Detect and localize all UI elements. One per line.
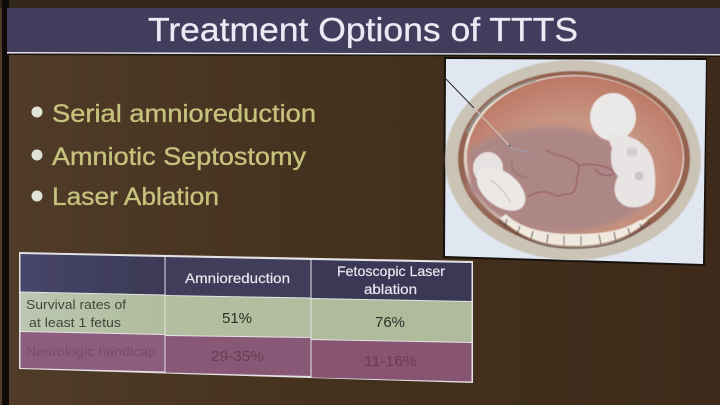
bullet: laser ablation: Laser Ablation <box>52 183 219 211</box>
row label: survival rates: at least 1 fetus <box>29 315 122 330</box>
value: 76%: 76% <box>375 314 405 331</box>
table row: neurologic handicap <box>20 332 472 382</box>
table header row <box>20 254 472 301</box>
comparison table <box>19 252 473 383</box>
fetoscope needle <box>446 79 510 146</box>
placental vessels <box>508 146 626 197</box>
bullet list <box>32 100 316 211</box>
value: 29-35%: 29-35% <box>211 348 264 365</box>
placenta edge and cervix segments <box>498 214 650 248</box>
row label: survival rates: Survival rates of <box>26 297 126 312</box>
fetus: smaller donor twin <box>468 152 534 220</box>
column heading: fetoscopic laser ablation <box>337 263 445 297</box>
illustration: fetoscopic laser treatment of twins in uterus <box>443 57 707 266</box>
uterine wall <box>445 60 701 260</box>
bullet: serial amnioreduction: Serial amnioreduction <box>52 100 316 128</box>
row label: neurologic handicap: Neurologic handicap <box>26 344 156 359</box>
row label: survival rates <box>26 297 126 330</box>
title: Treatment Options of TTTS <box>148 11 578 48</box>
bullet: amniotic septostomy: Amniotic Septostomy <box>52 143 307 171</box>
value: 11-16%: 11-16% <box>364 353 417 370</box>
column heading: amnioreduction: Amnioreduction <box>185 270 290 286</box>
title bar <box>7 8 720 57</box>
placenta <box>468 127 655 233</box>
column heading: fetoscopic laser ablation: Fetoscopic Laser <box>337 263 445 279</box>
fetus: larger recipient twin <box>590 93 655 207</box>
value: 51%: 51% <box>222 310 252 327</box>
table row: survival rates <box>20 292 472 342</box>
column heading: fetoscopic laser ablation: ablation <box>364 281 417 297</box>
